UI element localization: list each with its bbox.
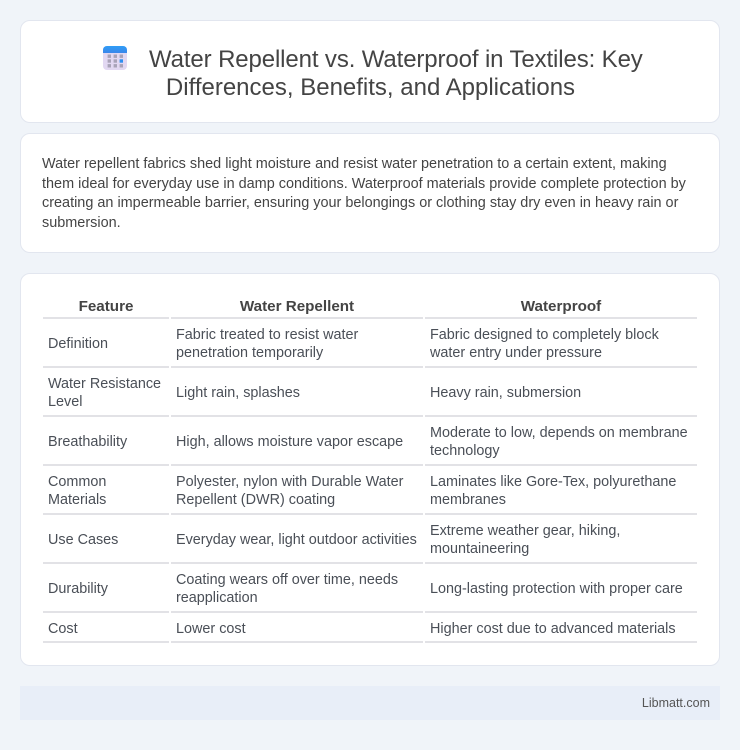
title: Differences, Benefits, and Applications — [166, 74, 575, 100]
row: water resistance level: Water Resistance — [48, 376, 161, 392]
row: cost: Cost — [48, 621, 78, 637]
row: water resistance level — [48, 376, 581, 410]
table header: Waterproof — [521, 298, 601, 315]
row: use cases — [48, 523, 620, 557]
row: common materials: membranes — [430, 492, 506, 508]
row: breathability — [48, 425, 688, 459]
row: common materials: Polyester, nylon with Durable Water — [176, 474, 403, 490]
row: definition: water entry under pressure — [430, 345, 602, 361]
row: common materials: Materials — [48, 492, 106, 508]
table header: Water Repellent — [240, 298, 354, 315]
table header: Feature — [79, 298, 133, 315]
row: durability: Long-lasting protection with proper care — [430, 581, 683, 597]
intro text: submersion. — [42, 214, 121, 230]
intro text: them ideal for everyday use in damp conditions. Waterproof materials provide complete protection by — [42, 176, 686, 192]
row: durability: Coating wears off over time, needs — [176, 572, 398, 588]
icon: calendar — [103, 46, 127, 70]
row: definition — [48, 327, 659, 361]
row: durability — [48, 572, 683, 606]
row: water resistance level: Light rain, splashes — [176, 385, 300, 401]
row: breathability: High, allows moisture vapor escape — [176, 434, 403, 450]
row: definition: Fabric designed to completely block — [430, 327, 659, 343]
footer source text: Libmatt.com — [642, 696, 710, 710]
row: water resistance level: Heavy rain, submersion — [430, 385, 581, 401]
row: durability: Durability — [48, 581, 108, 597]
title card — [20, 20, 720, 123]
title — [149, 46, 643, 100]
footer — [20, 686, 720, 720]
row: use cases: Everyday wear, light outdoor activities — [176, 532, 417, 548]
intro text — [42, 156, 686, 230]
intro text card — [20, 133, 720, 253]
row: use cases: mountaineering — [430, 541, 529, 557]
row: common materials: Common — [48, 474, 106, 490]
row: water resistance level: Level — [48, 394, 82, 410]
intro text: creating an impermeable barrier, ensuring your belongings or clothing stay dry even in heavy rain or — [42, 195, 678, 211]
comparison table card — [20, 273, 720, 666]
row: cost — [48, 621, 676, 637]
row: use cases: Extreme weather gear, hiking, — [430, 523, 620, 539]
row: common materials: Repellent (DWR) coating — [176, 492, 335, 508]
row: common materials: Laminates like Gore-Tex, polyurethane — [430, 474, 676, 490]
row: breathability: technology — [430, 443, 500, 459]
row: definition: Definition — [48, 336, 108, 352]
row: cost: Lower cost — [176, 621, 246, 637]
row: common materials — [48, 474, 676, 508]
row: definition: Fabric treated to resist water — [176, 327, 358, 343]
row: definition: penetration temporarily — [176, 345, 323, 361]
row: durability: reapplication — [176, 590, 258, 606]
table header — [79, 298, 602, 315]
title: Water Repellent vs. Waterproof in Textiles: Key — [149, 46, 643, 73]
row: breathability: Breathability — [48, 434, 127, 450]
row: use cases: Use Cases — [48, 532, 118, 548]
row: breathability: Moderate to low, depends on membrane — [430, 425, 688, 441]
row: cost: Higher cost due to advanced materials — [430, 621, 676, 637]
intro text: Water repellent fabrics shed light moisture and resist water penetration to a certain extent, making — [42, 156, 667, 172]
